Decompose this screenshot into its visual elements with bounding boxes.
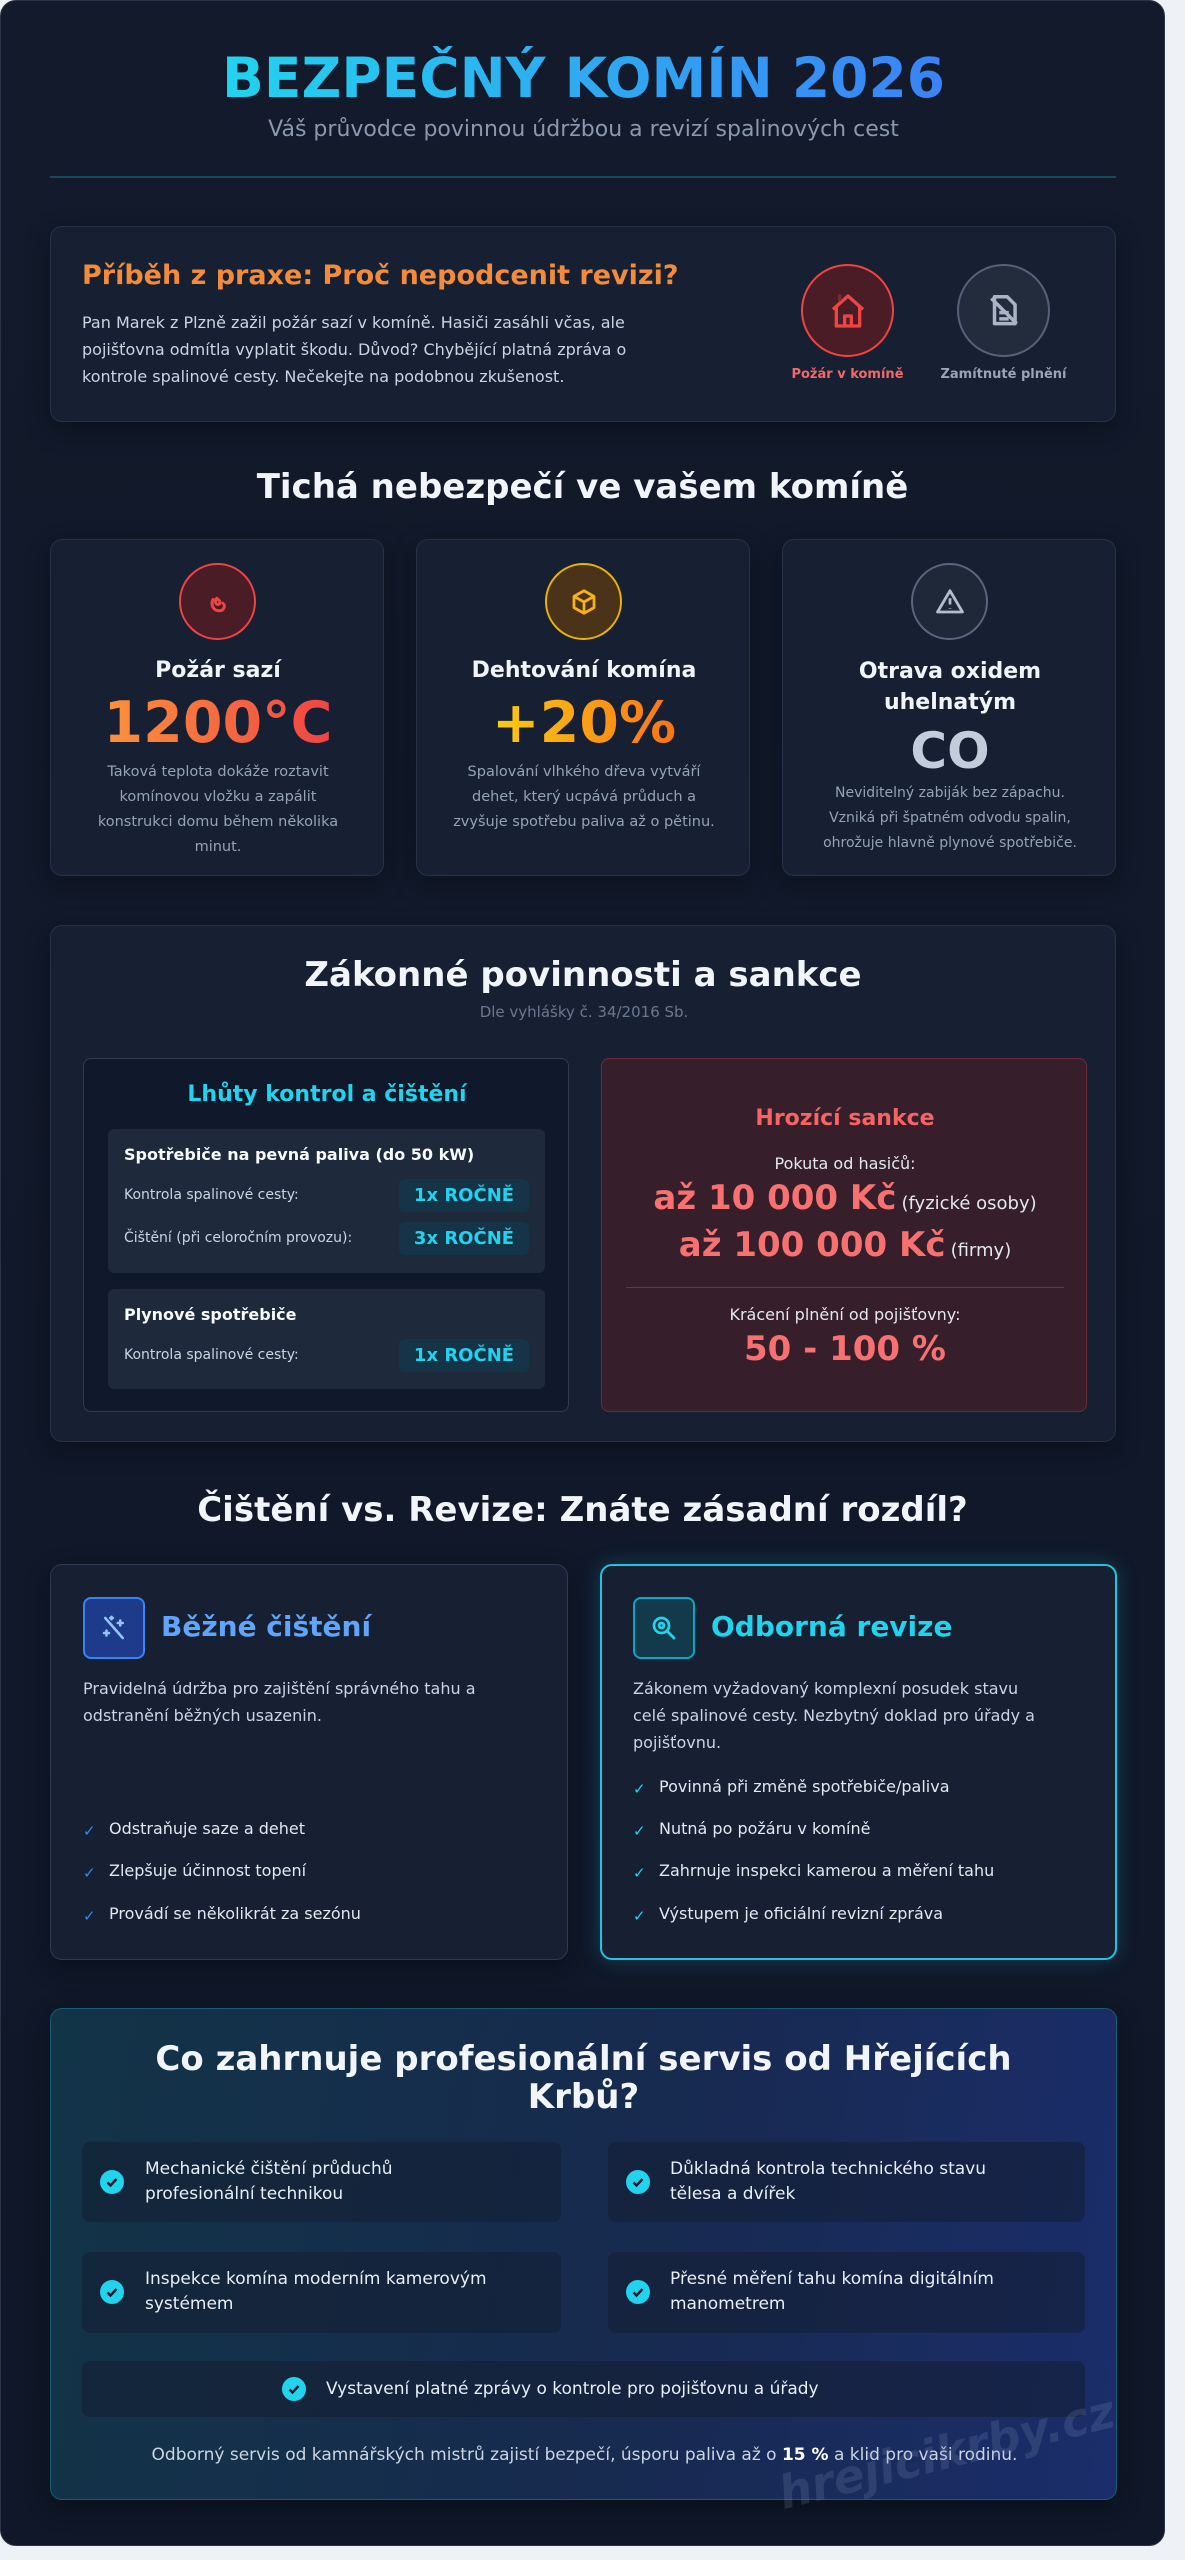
fine companies: až 100 000 Kč (firmy) xyxy=(679,1225,1011,1265)
deadlines heading: Lhůty kontrol a čištění xyxy=(187,1082,467,1107)
panel: cleaning: ✓ xyxy=(83,1864,96,1882)
service heading xyxy=(155,2039,1012,2117)
legal subtitle: Dle vyhlášky č. 34/2016 Sb. xyxy=(480,1003,688,1021)
icon label: fire: Požár v komíně xyxy=(791,367,904,382)
panel: story xyxy=(50,226,1116,422)
description: zvyšuje spotřebu paliva až o pětinu. xyxy=(453,814,715,830)
icon: magnifier xyxy=(633,1597,695,1659)
box heading: Plynové spotřebiče xyxy=(124,1305,297,1324)
box heading: Spotřebiče na pevná paliva (do 50 kW) xyxy=(124,1145,474,1164)
list item: Provádí se několikrát za sezónu xyxy=(109,1904,361,1923)
box: solid fuel xyxy=(108,1129,545,1273)
description: Taková teplota dokáže roztavit xyxy=(107,764,329,780)
item text: Přesné měření tahu komína digitálním xyxy=(670,2269,994,2289)
panel: revision: ✓ xyxy=(633,1780,646,1798)
box: gas xyxy=(108,1289,545,1389)
panel: tar xyxy=(416,539,750,876)
card title: uhelnatým xyxy=(884,690,1016,715)
description: dehet, který ucpává průduch a xyxy=(472,789,696,805)
list item: Nutná po požáru v komíně xyxy=(659,1819,870,1838)
list item: Výstupem je oficiální revizní zpráva xyxy=(659,1904,943,1923)
item text: manometrem xyxy=(670,2294,785,2314)
service item xyxy=(82,2252,561,2333)
panel: revision: ✓ xyxy=(633,1822,646,1840)
card title: Dehtování komína xyxy=(472,658,696,683)
icon: rejected document xyxy=(957,264,1050,357)
description xyxy=(823,785,1077,851)
description: celé spalinové cesty. Nezbytný doklad pro úřady a xyxy=(633,1706,1035,1725)
description: minut. xyxy=(195,839,241,855)
story text: kontrole spalinové cesty. Nečekejte na podobnou zkušenost. xyxy=(82,367,564,386)
subpanel: sanctions xyxy=(601,1058,1087,1412)
heading: silent dangers: Tichá nebezpečí ve vašem komíně xyxy=(257,467,908,507)
panel: legal xyxy=(50,925,1116,1442)
panel: professional service xyxy=(50,2008,1117,2500)
badge xyxy=(399,1222,529,1255)
card title: Běžné čištění xyxy=(161,1610,371,1643)
icon label: rejected: Zamítnuté plnění xyxy=(940,367,1067,382)
big value: CO xyxy=(910,722,990,780)
service footer text: Odborný servis od kamnářských mistrů zajistí bezpečí, úsporu paliva až o 15 % a klid pro vaši rodinu. xyxy=(152,2445,1017,2465)
heading: cleaning vs revision: Čištění vs. Revize: Znáte zásadní rozdíl? xyxy=(197,1490,968,1530)
service item xyxy=(82,2142,561,2222)
item text: Inspekce komína moderním kamerovým xyxy=(145,2269,487,2289)
watermark: hrejicikrby.cz xyxy=(773,2384,1120,2520)
service item xyxy=(608,2142,1085,2222)
story text: pojišťovna odmítla vyplatit škodu. Důvod? Chybějící platná zpráva o xyxy=(82,340,626,359)
description: konstrukci domu během několika xyxy=(98,814,338,830)
service heading: Co zahrnuje profesionální servis od Hřejících xyxy=(155,2039,1012,2079)
description: Spalování vlhkého dřeva vytváří xyxy=(468,764,700,780)
service heading: Krbů? xyxy=(528,2077,639,2117)
item text: profesionální technikou xyxy=(145,2184,343,2204)
check icon xyxy=(282,2377,306,2401)
description xyxy=(633,1679,1035,1752)
panel: revision: ✓ xyxy=(633,1907,646,1925)
card title: Odborná revize xyxy=(711,1610,952,1643)
story heading: Příběh z praxe: Proč nepodcenit revizi? xyxy=(82,260,679,291)
panel: cleaning: ✓ xyxy=(83,1907,96,1925)
description xyxy=(453,764,715,830)
row label: Kontrola spalinové cesty: xyxy=(124,1187,299,1203)
insurance label: Krácení plnění od pojišťovny: xyxy=(729,1305,960,1324)
item text: Důkladná kontrola technického stavu xyxy=(670,2159,986,2179)
big number: +20% xyxy=(492,690,676,756)
panel: soot fire xyxy=(50,539,384,876)
badge: 1x ROČNĚ xyxy=(414,1345,514,1366)
list item: Zlepšuje účinnost topení xyxy=(109,1861,306,1880)
badge: 3x ROČNĚ xyxy=(414,1228,514,1249)
check icon xyxy=(100,2170,124,2194)
card title xyxy=(859,659,1041,715)
item text xyxy=(670,2269,994,2314)
badge: 1x ROČNĚ xyxy=(414,1185,514,1206)
sanctions heading: Hrozící sankce xyxy=(755,1106,935,1131)
item text: tělesa a dvířek xyxy=(670,2184,795,2204)
panel: CO xyxy=(782,539,1116,876)
fine persons: až 10 000 Kč (fyzické osoby) xyxy=(653,1178,1037,1218)
icon: house fire xyxy=(801,264,894,357)
title: BEZPEČNÝ KOMÍN 2026 xyxy=(222,46,945,110)
description: komínovou vložku a zapálit xyxy=(120,789,316,805)
subpanel: deadlines xyxy=(83,1058,569,1412)
description xyxy=(83,1679,476,1725)
story text xyxy=(82,313,626,386)
item text: Mechanické čištění průduchů xyxy=(145,2159,393,2179)
insurance value: 50 - 100 % xyxy=(744,1329,946,1369)
description: pojišťovnu. xyxy=(633,1733,721,1752)
description: Neviditelný zabiják bez zápachu. xyxy=(835,785,1065,801)
subtitle: Váš průvodce povinnou údržbou a revizí spalinových cest xyxy=(268,117,899,142)
item text xyxy=(145,2159,393,2204)
service item wide xyxy=(82,2361,1085,2417)
row label: Čištění (při celoročním provozu): xyxy=(124,1230,352,1246)
icon: flame xyxy=(179,563,256,640)
panel: revision xyxy=(600,1564,1117,1960)
fine label: Pokuta od hasičů: xyxy=(774,1154,916,1173)
big number: 1200°C xyxy=(104,690,332,756)
check icon xyxy=(100,2280,124,2304)
list item: Zahrnuje inspekci kamerou a měření tahu xyxy=(659,1861,994,1880)
description: Zákonem vyžadovaný komplexní posudek stavu xyxy=(633,1679,1018,1698)
panel: cleaning xyxy=(50,1564,568,1960)
list item: Povinná při změně spotřebiče/paliva xyxy=(659,1777,950,1796)
item text xyxy=(145,2269,487,2314)
description: Pravidelná údržba pro zajištění správného tahu a xyxy=(83,1679,476,1698)
item text xyxy=(670,2159,986,2204)
icon: cube xyxy=(545,563,622,640)
description: Vzniká při špatném odvodu spalin, xyxy=(829,810,1071,826)
item text: systémem xyxy=(145,2294,233,2314)
badge xyxy=(399,1179,529,1212)
description xyxy=(98,764,338,855)
description: ohrožuje hlavně plynové spotřebiče. xyxy=(823,835,1077,851)
panel: revision: ✓ xyxy=(633,1864,646,1882)
icon: broom xyxy=(83,1597,145,1659)
icon: warning xyxy=(911,563,988,640)
story text: Pan Marek z Plzně zažil požár sazí v komíně. Hasiči zasáhli včas, ale xyxy=(82,313,625,332)
check icon xyxy=(626,2280,650,2304)
check icon xyxy=(626,2170,650,2194)
card title: Požár sazí xyxy=(155,658,281,683)
legal heading: Zákonné povinnosti a sankce xyxy=(304,955,862,995)
badge xyxy=(399,1339,529,1372)
row label: Kontrola spalinové cesty: xyxy=(124,1347,299,1363)
list item: Odstraňuje saze a dehet xyxy=(109,1819,305,1838)
description: odstranění běžných usazenin. xyxy=(83,1706,322,1725)
card title: Otrava oxidem xyxy=(859,659,1041,684)
panel: cleaning: ✓ xyxy=(83,1822,96,1840)
item text: Vystavení platné zprávy o kontrole pro pojišťovnu a úřady xyxy=(326,2379,819,2399)
service item xyxy=(608,2252,1085,2333)
